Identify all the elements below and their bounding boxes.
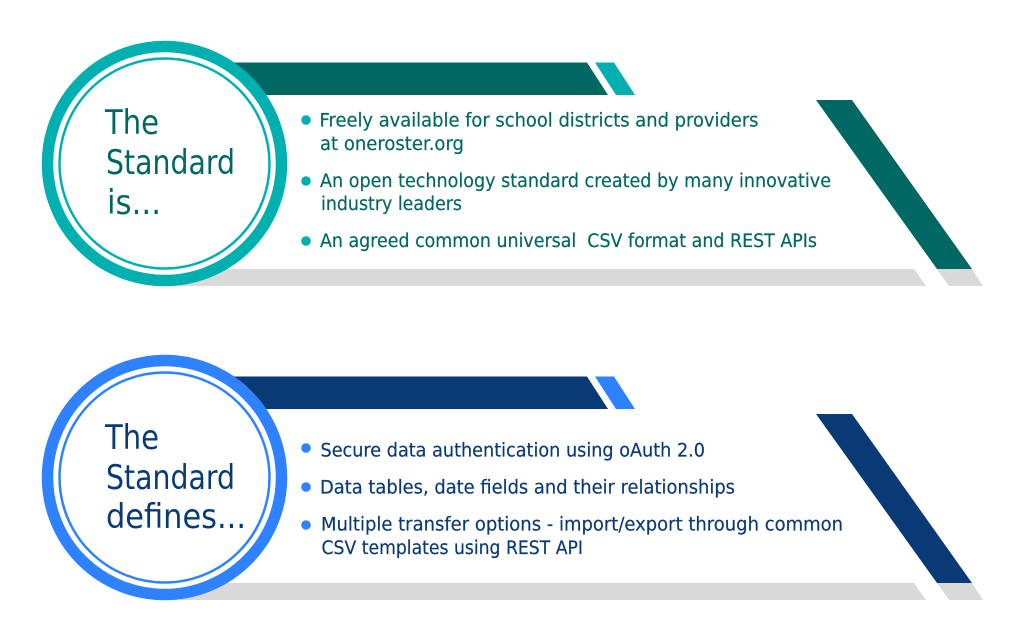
gray corner piece bbox=[937, 583, 983, 600]
teal accent parallelogram bbox=[595, 62, 635, 95]
bullet 3 bbox=[301, 514, 843, 559]
bullet 3: CSV templates using REST API bbox=[322, 538, 583, 559]
heading: The Standard defines...: defines... bbox=[106, 497, 246, 536]
heading: The Standard is...: The bbox=[104, 103, 159, 142]
bullet 1: Secure data authentication using oAuth 2.0 bbox=[320, 440, 705, 462]
heading: The Standard is...: Standard bbox=[106, 143, 235, 182]
panel: the standard defines bbox=[48, 360, 983, 600]
gray base bar bbox=[180, 269, 926, 286]
heading: The Standard is...: is... bbox=[107, 183, 161, 222]
heading: The Standard defines...: Standard bbox=[106, 458, 235, 497]
bullet 3: An agreed common universal CSV format and REST APIs bbox=[320, 231, 817, 252]
bullet 2 bbox=[301, 171, 831, 215]
heading: The Standard is... bbox=[104, 103, 235, 222]
bullet 1: at oneroster.org bbox=[320, 134, 464, 155]
heading: The Standard defines...: The bbox=[104, 418, 159, 457]
panel: the standard is bbox=[48, 46, 983, 286]
bullet 2: An open technology standard created by many innovative bbox=[320, 171, 831, 192]
navy diagonal band bbox=[816, 414, 972, 583]
dark header bar bbox=[200, 62, 608, 95]
bullet list bbox=[301, 110, 831, 252]
bullet 2: industry leaders bbox=[321, 194, 462, 215]
bullet 1: Freely available for school districts and providers bbox=[320, 110, 758, 132]
dark diagonal band bbox=[816, 100, 972, 269]
bullet 1 bbox=[301, 110, 758, 155]
circle badge bbox=[48, 360, 282, 594]
blue accent parallelogram bbox=[595, 376, 635, 409]
bullet 2: Data tables, date fields and their relationships bbox=[320, 478, 735, 498]
heading: The Standard defines... bbox=[104, 418, 246, 536]
navy header bar bbox=[200, 376, 608, 409]
bullet 3: Multiple transfer options - import/export through common bbox=[321, 514, 843, 536]
circle badge bbox=[48, 46, 282, 280]
gray base bar bbox=[180, 583, 926, 600]
gray corner piece bbox=[937, 269, 983, 286]
bullet list bbox=[301, 440, 843, 559]
